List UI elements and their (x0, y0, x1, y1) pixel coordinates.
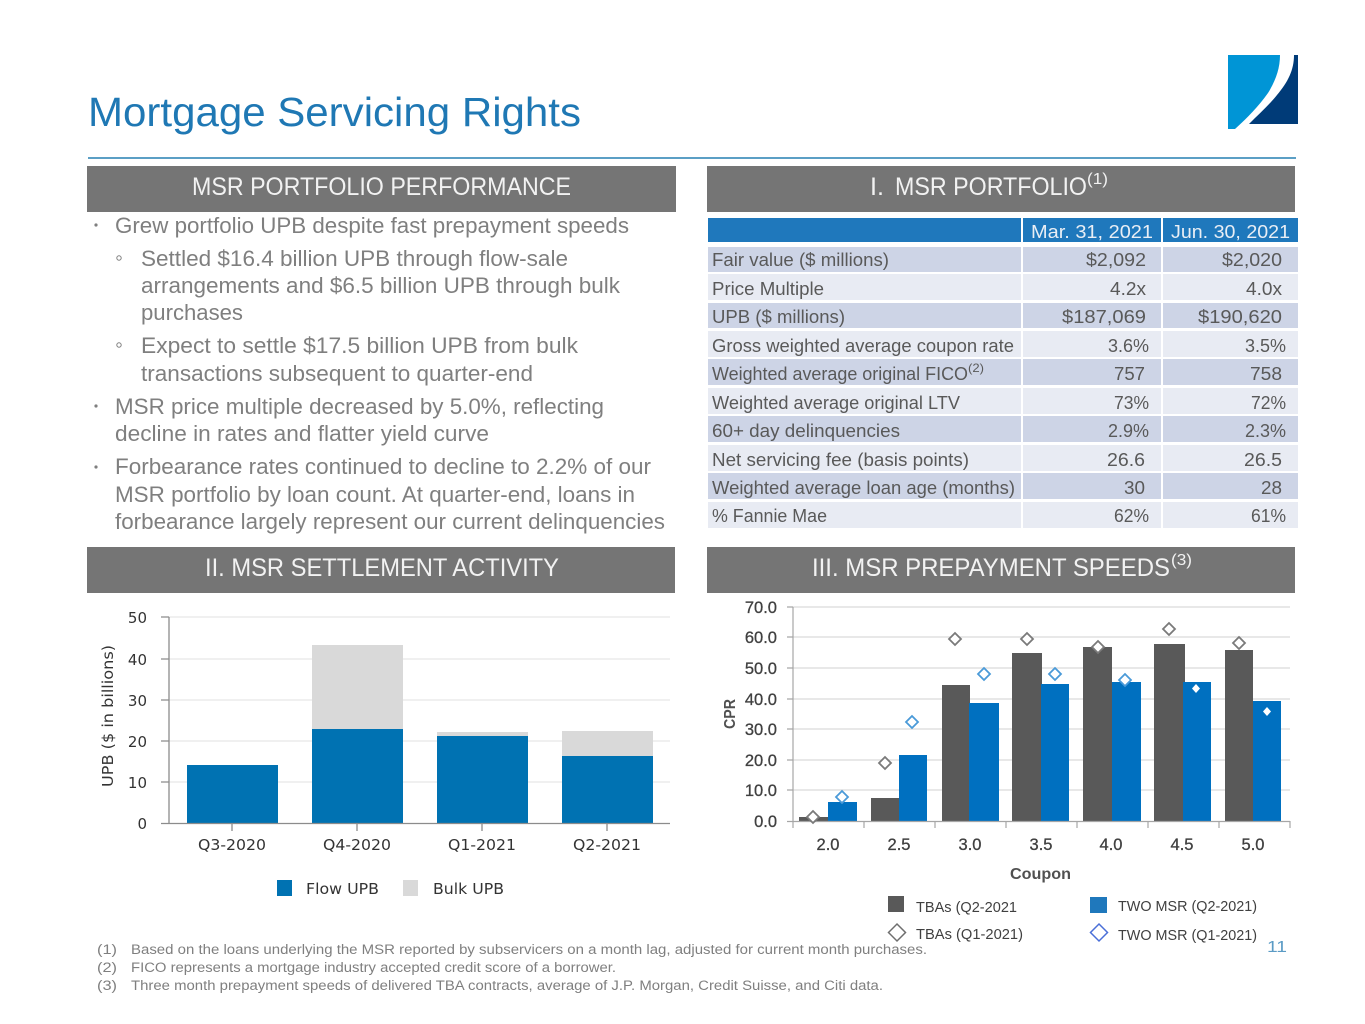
bar chart: settlement activity (99, 609, 670, 898)
text block: performance bullets: forbearance largely represent our current delinquencies (115, 509, 665, 534)
x axis labels: 5.0 (1242, 836, 1264, 854)
text block: performance bullets: Forbearance rates continued to decline to 2.2% of our (115, 454, 651, 479)
table row: UPB: UPB ($ millions) (712, 306, 845, 327)
y axis labels (745, 599, 777, 831)
table row: delinquencies: 2.3% (1245, 420, 1286, 441)
y axis labels: 20.0 (745, 752, 777, 770)
bars: Q1-2021 (437, 732, 528, 823)
y axis labels: 70.0 (745, 599, 777, 617)
icon: company logo (1228, 55, 1298, 129)
table row: coupon rate (708, 331, 1298, 357)
y axis title: UPB ($ in billions) (99, 645, 117, 787)
y axis labels: 0 (137, 815, 147, 833)
x axis labels: 2.0 (817, 836, 839, 854)
x axis labels: Q4-2020 (323, 836, 391, 854)
legend (277, 880, 504, 898)
table header row (708, 218, 1298, 242)
panel: MSR portfolio table (707, 166, 1298, 528)
table row: Fannie Mae: 61% (1251, 505, 1286, 526)
heading: MSR portfolio: MSR PORTFOLIO (895, 173, 1087, 201)
x axis labels: 3.5 (1030, 836, 1052, 854)
y axis labels (128, 609, 147, 833)
x axis labels: Q3-2020 (198, 836, 266, 854)
y axis labels: 0.0 (754, 813, 777, 831)
bars: TWO MSR Q2-2021 (828, 682, 1281, 821)
table row: coupon rate: Gross weighted average coupon rate (712, 335, 1014, 356)
table row: LTV (708, 388, 1298, 414)
text block: performance bullets: MSR price multiple decreased by 5.0%, reflecting (115, 394, 604, 419)
text block: performance bullets: transactions subsequent to quarter-end (141, 361, 533, 386)
legend: TBAs (Q2-2021 (916, 900, 1017, 916)
text block: performance bullets (94, 213, 665, 534)
table row: Fannie Mae: 62% (1114, 505, 1149, 526)
x axis labels: 4.0 (1100, 836, 1122, 854)
table row: servicing fee: 26.6 (1107, 449, 1145, 470)
text block: performance bullets: Expect to settle $17.5 billion UPB from bulk (141, 333, 579, 358)
table row: delinquencies: 2.9% (1108, 420, 1149, 441)
table row: price multiple: 4.2x (1110, 278, 1147, 299)
x axis labels: 2.5 (888, 836, 910, 854)
y axis labels: 60.0 (745, 629, 777, 647)
text block: performance bullets: Settled $16.4 billion UPB through flow-sale (141, 246, 568, 271)
bars: Q2-2021 (562, 731, 653, 823)
text block: performance bullets: Grew portfolio UPB despite fast prepayment speeds (115, 213, 629, 238)
x axis labels: Q1-2021 (448, 836, 516, 854)
legend (888, 896, 1257, 944)
table row: servicing fee (708, 445, 1298, 471)
table row: delinquencies: 60+ day delinquencies (712, 420, 900, 441)
table row: fair value: $2,020 (1222, 249, 1282, 270)
markers: TWO MSR Q1-2021 (836, 668, 1271, 803)
footnotes: FICO represents a mortgage industry accepted credit score of a borrower. (131, 960, 616, 975)
legend: Bulk UPB (433, 880, 504, 898)
table row: delinquencies (708, 416, 1298, 442)
text block: performance bullets: purchases (141, 300, 243, 325)
panel: MSR portfolio performance (87, 166, 676, 534)
heading: MSR portfolio performance: MSR PORTFOLIO PERFORMANCE (192, 173, 571, 201)
footnotes: (3) (97, 978, 117, 993)
table row: UPB: $190,620 (1198, 306, 1282, 327)
y axis title: CPR (722, 699, 739, 729)
table row: coupon rate: 3.5% (1245, 335, 1286, 356)
page number: 11 (1267, 939, 1287, 956)
heading: MSR settlement activity (87, 547, 675, 593)
legend: TBAs (Q1-2021) (916, 927, 1023, 943)
footnotes: (1) (97, 942, 117, 957)
table row: fair value: $2,092 (1086, 249, 1146, 270)
table row: Fannie Mae (708, 502, 1298, 528)
markers: TBAs Q1-2021 (807, 623, 1245, 823)
footnotes: (2) (97, 960, 117, 975)
text block: performance bullets: decline in rates and flatter yield curve (115, 421, 489, 446)
table row: LTV: Weighted average original LTV (712, 392, 961, 413)
y axis labels: 50.0 (745, 660, 777, 678)
heading: MSR portfolio: (1) (1087, 171, 1108, 188)
heading: MSR portfolio: I. (870, 173, 884, 201)
table row: FICO: 758 (1250, 363, 1282, 384)
table header row: Jun. 30, 2021 (1171, 221, 1290, 242)
x axis labels: 3.0 (959, 836, 981, 854)
y axis labels: 40 (128, 651, 147, 669)
x axis labels: 4.5 (1171, 836, 1193, 854)
legend: TWO MSR (Q2-2021) (1118, 899, 1257, 915)
heading: MSR portfolio performance (87, 166, 676, 212)
table row: servicing fee: Net servicing fee (basis points) (712, 449, 969, 470)
bars: TBAs Q2-2021 (799, 644, 1253, 821)
text block: performance bullets: arrangements and $6.5 billion UPB through bulk (141, 273, 621, 298)
table row: UPB: $187,069 (1062, 306, 1146, 327)
y axis labels: 20 (128, 733, 147, 751)
table row: loan age: Weighted average loan age (months) (712, 477, 1015, 498)
x axis labels (198, 836, 641, 854)
text block: performance bullets: MSR portfolio by loan count. At quarter-end, loans in (115, 482, 635, 507)
legend: Flow UPB (306, 880, 379, 898)
table row: price multiple (708, 274, 1298, 300)
table row: servicing fee: 26.5 (1244, 449, 1282, 470)
title: Mortgage Servicing Rights (88, 89, 581, 135)
footnotes: Based on the loans underlying the MSR reported by subservicers on a month lag, adjusted for current month purchases. (131, 942, 927, 957)
footnotes (97, 942, 927, 993)
bars: Q4-2020 (312, 645, 403, 823)
y axis labels: 10.0 (745, 782, 777, 800)
x axis title: Coupon (1010, 866, 1071, 883)
table row: FICO: (2) (968, 361, 984, 375)
y axis labels: 30.0 (745, 721, 777, 739)
bars: Q3-2020 (187, 765, 278, 823)
table row: price multiple: 4.0x (1246, 278, 1283, 299)
heading: MSR prepayment speeds (707, 547, 1295, 593)
table row: LTV: 73% (1114, 392, 1149, 413)
y axis labels: 30 (128, 692, 147, 710)
table row: LTV: 72% (1251, 392, 1286, 413)
table row: Fannie Mae: % Fannie Mae (712, 505, 827, 526)
legend: TWO MSR (Q1-2021) (1118, 928, 1257, 944)
table row: fair value: Fair value ($ millions) (712, 249, 889, 270)
table row: FICO: 757 (1114, 363, 1145, 384)
table row: loan age (708, 473, 1298, 499)
y axis labels: 10 (128, 774, 147, 792)
x axis labels (817, 836, 1264, 854)
table row: price multiple: Price Multiple (712, 278, 824, 299)
table row: fair value (708, 247, 1298, 272)
panel: MSR prepayment speeds (707, 547, 1295, 944)
combo chart: prepayment speeds (722, 599, 1290, 944)
table row: FICO: Weighted average original FICO (712, 363, 968, 384)
table row: loan age: 30 (1124, 477, 1145, 498)
y axis labels: 50 (128, 609, 147, 627)
panel: MSR settlement activity (87, 547, 675, 898)
footnotes: Three month prepayment speeds of delivered TBA contracts, average of J.P. Morgan, Credit Suisse, and Citi data. (131, 978, 883, 993)
y axis labels: 40.0 (745, 691, 777, 709)
x axis labels: Q2-2021 (573, 836, 641, 854)
heading: MSR prepayment speeds: (3) (1171, 552, 1192, 569)
table header row: Mar. 31, 2021 (1031, 221, 1153, 242)
table row: loan age: 28 (1261, 477, 1282, 498)
table row: UPB (708, 303, 1298, 328)
heading: MSR settlement activity: II. MSR SETTLEMENT ACTIVITY (205, 554, 559, 582)
heading: MSR portfolio (707, 166, 1295, 212)
table row: FICO (708, 359, 1298, 385)
heading: MSR prepayment speeds: III. MSR PREPAYMENT SPEEDS (812, 554, 1170, 582)
table row: coupon rate: 3.6% (1108, 335, 1149, 356)
